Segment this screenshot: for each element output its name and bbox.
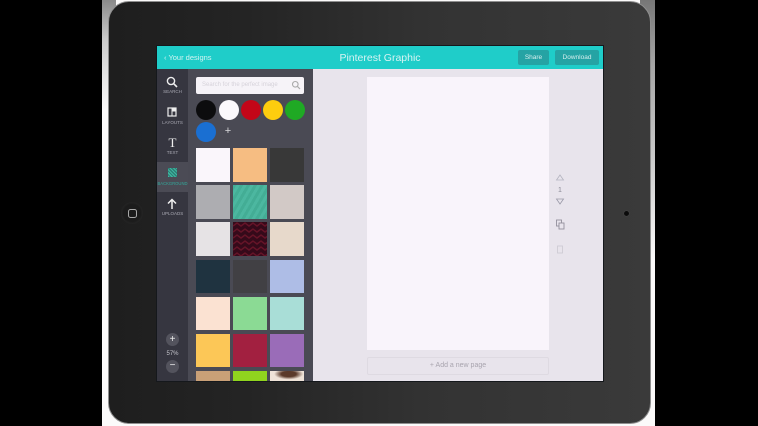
colour swatches: +: [225, 125, 231, 137]
page controls: [556, 174, 564, 254]
tablet body: [108, 1, 651, 424]
icon: layouts: [167, 107, 177, 117]
silver reflection: left edge: [102, 0, 116, 110]
colour swatches: [196, 100, 305, 142]
label: text: TEXT: [167, 150, 178, 155]
share button: [518, 50, 549, 65]
download button: Download: [563, 54, 591, 61]
label: uploads: UPLOADS: [162, 211, 183, 216]
icon: background pattern: [168, 168, 177, 177]
camera: [624, 211, 629, 216]
page controls: 1: [558, 187, 562, 194]
background: white backing behind tablet: [102, 0, 655, 426]
active background tab: [157, 162, 188, 192]
zoom out button: −: [170, 360, 175, 371]
icon: search: [166, 76, 178, 88]
panel: backgrounds: [188, 69, 313, 381]
add a new page button: [367, 357, 549, 375]
label: layouts: LAYOUTS: [162, 120, 183, 124]
screen: [157, 46, 603, 381]
search box: [196, 77, 304, 94]
silver reflection: right edge: [640, 0, 655, 260]
top bar: [157, 46, 603, 69]
share button: Share: [525, 54, 542, 61]
label: search: SEARCH: [163, 88, 182, 94]
icon: search box magnifier: [292, 81, 300, 90]
label: background: BACKGROUND: [157, 180, 188, 186]
background thumbnails: [196, 148, 304, 381]
zoom out button: [166, 360, 179, 373]
icon: text: T: [169, 135, 176, 150]
download button: [555, 50, 599, 65]
zoom level: 57%: [166, 351, 178, 357]
document title: Pinterest Graphic: [339, 52, 421, 64]
sidebar: [157, 69, 188, 381]
design page: [367, 77, 549, 350]
back link: ‹ Your designs: [164, 53, 212, 62]
home button: [121, 202, 143, 224]
zoom in button: +: [170, 334, 175, 345]
search box: Search for the perfect image: [202, 82, 278, 88]
zoom in button: [166, 333, 179, 346]
icon: uploads arrow: [168, 198, 176, 209]
add a new page button: + Add a new page: [430, 362, 486, 369]
